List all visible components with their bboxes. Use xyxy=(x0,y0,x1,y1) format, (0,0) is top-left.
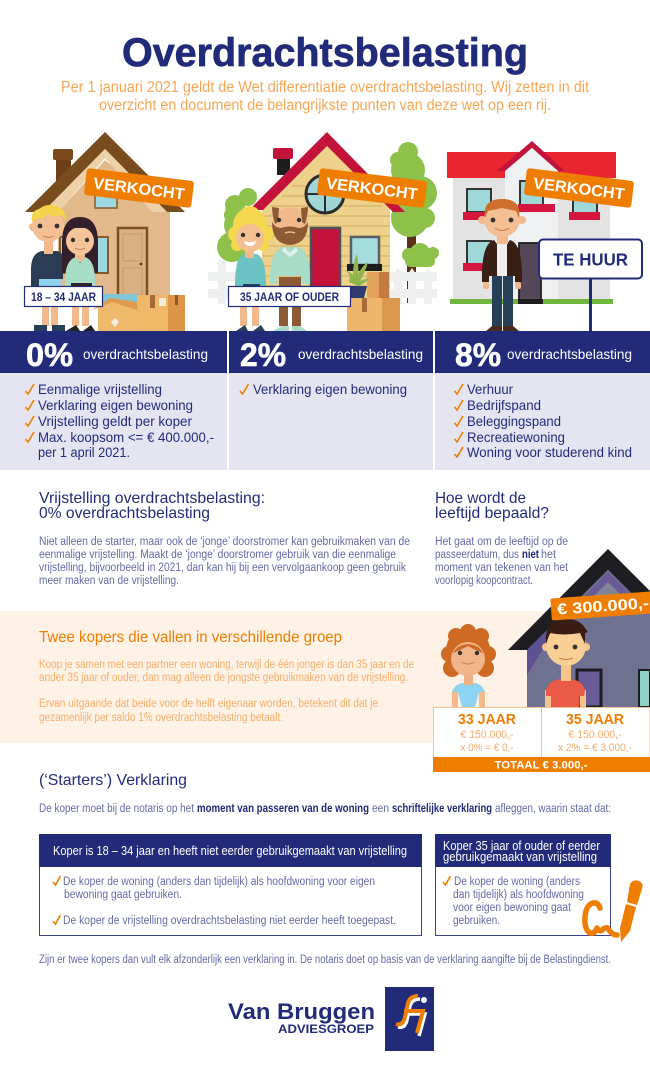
list 0% xyxy=(26,381,214,460)
box: koper 18-34 xyxy=(39,834,422,936)
logo wordmark xyxy=(228,999,375,1036)
text: leeftijd: voorlopig koopcontract. xyxy=(435,575,533,587)
header 8%: 8% xyxy=(455,337,501,373)
illustration: older couple with house xyxy=(208,132,439,331)
box header xyxy=(39,834,422,867)
logo: van bruggen xyxy=(228,987,434,1051)
header 0% xyxy=(0,331,227,373)
moving boxes and plant xyxy=(342,254,400,331)
header 8%: overdrachtsbelasting xyxy=(507,346,632,362)
person: girl with red hair xyxy=(441,624,496,707)
text: verklaring intro: afleggen, waarin staat dat: xyxy=(495,803,611,815)
person: young woman xyxy=(62,217,98,331)
house 1 xyxy=(25,132,185,301)
icon: pen with signature xyxy=(585,880,643,942)
list 0%: Eenmalige vrijstelling xyxy=(38,381,162,397)
illustration: purple house with buyers xyxy=(441,549,650,707)
age label: 35+ xyxy=(228,286,350,306)
price tag xyxy=(550,591,650,620)
column: 35 jaar: x 2% = € 3.000,- xyxy=(558,742,632,754)
column: 33 jaar: x 0% = € 0,- xyxy=(460,742,514,754)
intro text xyxy=(61,79,590,114)
box list: De koper de woning (anders dan tijdelijk) als hoofdwoning voor eigen xyxy=(63,876,375,888)
column: 33 jaar: € 150.000,- xyxy=(460,729,514,741)
total bar: TOTAAL € 3.000,- xyxy=(494,760,588,772)
header 2%: overdrachtsbelasting xyxy=(298,346,423,362)
sign: te huur: TE HUUR xyxy=(553,250,628,270)
text: twee kopers: Koop je samen met een partner een woning, terwijl de één jonger is dan 35 jaar en de xyxy=(39,659,414,671)
title: Overdrachtsbelasting xyxy=(122,31,528,75)
text: leeftijd xyxy=(435,536,569,587)
person: boy with dark hair xyxy=(542,619,590,707)
list 0%: Vrijstelling geldt per koper xyxy=(38,413,192,429)
list 0%: per 1 april 2021. xyxy=(38,444,130,460)
logo wordmark: Van Bruggen xyxy=(228,999,375,1024)
text: verklaring intro: De koper moet bij de notaris op het xyxy=(39,803,195,815)
header 2%: 2% xyxy=(240,337,286,373)
illustration: investor with rental house xyxy=(447,141,642,331)
text: leeftijd: Het gaat om de leeftijd op de xyxy=(435,536,568,548)
panel: 2% xyxy=(229,331,433,470)
house 3 xyxy=(447,141,616,304)
heading: twee kopers: Twee kopers die vallen in verschillende groep xyxy=(39,629,342,646)
list 0%: Verklaring eigen bewoning xyxy=(38,397,193,413)
fence xyxy=(208,260,437,304)
box list: bewoning gaat gebruiken. xyxy=(64,889,182,901)
tag: verkocht 2 xyxy=(317,168,427,208)
text: twee kopers: ander 35 jaar of ouder, dan mag alleen de jongste gebruikmaken van de vrijstelling. xyxy=(39,672,408,684)
panel: 0% xyxy=(0,331,227,470)
box list: De koper de vrijstelling overdrachtsbelasting niet eerder heeft toegepast. xyxy=(63,915,396,927)
person: young man xyxy=(29,205,66,331)
box list: De koper de woning (anders xyxy=(454,876,580,888)
box list xyxy=(443,876,584,927)
house 2 xyxy=(249,132,405,301)
price tag: € 300.000,- xyxy=(557,595,650,619)
sign: te huur xyxy=(539,240,642,331)
tag: verkocht 2: VERKOCHT xyxy=(325,175,419,204)
box list: dan tijdelijk) als hoofdwoning xyxy=(453,889,584,901)
box header: Koper is 18 – 34 jaar en heeft niet eerder gebruikgemaakt van vrijstelling xyxy=(53,844,407,858)
illustration: young couple with house xyxy=(24,132,194,331)
heading: leeftijd xyxy=(435,490,549,522)
text: vrijstelling: meer maken van de vrijstelling. xyxy=(39,575,179,587)
tag: verkocht 3: VERKOCHT xyxy=(532,175,626,204)
list 8%: Beleggingspand xyxy=(467,413,561,429)
column: 35 jaar: € 150.000,- xyxy=(568,729,622,741)
list 8%: Recreatiewoning xyxy=(467,429,565,445)
person: older woman xyxy=(228,206,273,331)
age label: 35+: 35 JAAR OF OUDER xyxy=(240,292,340,304)
text: twee kopers: Ervan uitgaande dat beide voor de helft eigenaar worden, betekent dit dat je xyxy=(39,698,378,710)
age label: 18-34 xyxy=(24,286,102,306)
text: verklaring intro: schriftelijke verklaring xyxy=(392,803,492,815)
person: older man xyxy=(270,207,310,331)
tag: verkocht 3 xyxy=(524,168,634,208)
box list: voor eigen bewoning gaat xyxy=(453,902,572,914)
box header: gebruikgemaakt van vrijstelling xyxy=(443,850,597,864)
tag: verkocht 1: VERKOCHT xyxy=(92,175,186,204)
heading: verklaring: (‘Starters’) Verklaring xyxy=(39,772,187,789)
house xyxy=(508,549,650,707)
heading: vrijstelling xyxy=(39,490,265,522)
panel: twee kopers band xyxy=(0,611,650,743)
list 2%: Verklaring eigen bewoning xyxy=(253,381,407,397)
text: vrijstelling: vrijstelling, bijvoorbeeld in 2021, dan kan hij bij een vervolgaankoop geen gebruik xyxy=(39,562,406,574)
logo wordmark: ADVIESGROEP xyxy=(278,1024,374,1036)
text: verklaring intro xyxy=(39,803,611,815)
tag: verkocht 1 xyxy=(84,168,194,208)
text: vrijstelling: Niet alleen de starter, maar ook de ‘jonge’ doorstromer kan gebruikmaken van de xyxy=(39,536,410,548)
text: verklaring intro: moment van passeren van de woning xyxy=(197,803,369,815)
heading: vrijstelling: Vrijstelling overdrachtsbelasting: xyxy=(39,490,265,507)
text: leeftijd: niet xyxy=(522,549,539,561)
heading: leeftijd: leeftijd bepaald? xyxy=(435,505,549,522)
box list: gebruiken. xyxy=(453,915,500,927)
text: vrijstelling: eenmalige vrijstelling. Maakt de ‘jonge’ doorstromer gebruik van die eenmalige xyxy=(39,549,396,561)
trees behind house 2 xyxy=(217,142,439,303)
box list xyxy=(53,876,396,927)
heading: vrijstelling: 0% overdrachtsbelasting xyxy=(39,505,210,522)
box header xyxy=(435,834,611,867)
column: 33 jaar: 33 JAAR xyxy=(458,711,516,728)
list 8%: Verhuur xyxy=(467,381,513,397)
moving boxes 1 xyxy=(92,294,185,331)
panel: 8% xyxy=(435,331,650,470)
column: 35 jaar: 35 JAAR xyxy=(566,711,624,728)
header 8% xyxy=(435,331,650,373)
list 0%: Max. koopsom <= € 400.000,- xyxy=(38,429,214,445)
header 2% xyxy=(229,331,433,373)
person: man in jacket xyxy=(478,199,526,331)
list 8% xyxy=(454,381,632,460)
header 0%: overdrachtsbelasting xyxy=(83,346,208,362)
text: leeftijd: passeerdatum, dus xyxy=(435,549,519,561)
text: twee kopers: gezamenlijk per saldo 1% overdrachtsbelasting betaalt. xyxy=(39,712,283,724)
text: leeftijd: het xyxy=(541,549,557,561)
heading: leeftijd: Hoe wordt de xyxy=(435,490,526,507)
box: koper 35+ xyxy=(435,834,611,936)
column: 35 jaar xyxy=(558,711,632,754)
text: vrijstelling xyxy=(39,536,410,587)
header 0%: 0% xyxy=(26,337,73,373)
text: twee kopers xyxy=(39,659,414,724)
list 8%: Woning voor studerend kind xyxy=(467,444,632,460)
logo emblem xyxy=(385,987,434,1051)
total bar xyxy=(433,757,650,772)
age label: 18-34: 18 – 34 JAAR xyxy=(31,292,97,304)
intro text: Per 1 januari 2021 geldt de Wet differentiatie overdrachtsbelasting. Wij zetten in dit xyxy=(61,79,590,96)
box header: Koper 35 jaar of ouder of eerder xyxy=(443,839,600,853)
text: verklaring intro: een xyxy=(372,803,389,815)
text: leeftijd: moment van tekenen van het xyxy=(435,562,569,574)
list 8%: Bedrijfspand xyxy=(467,397,541,413)
column: 33 jaar xyxy=(458,711,516,754)
intro text: overzicht en document de belangrijkste punten van deze wet op een rij. xyxy=(99,97,551,114)
table: cost calculation xyxy=(433,707,650,772)
